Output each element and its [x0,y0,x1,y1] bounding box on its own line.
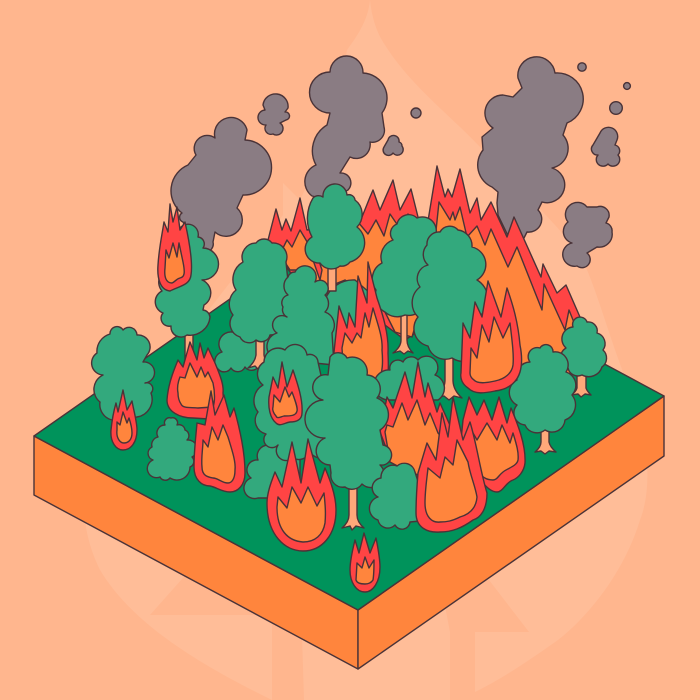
smoke plume right [478,57,583,240]
fire: small flame far left [111,390,137,450]
fire: centre flame [380,362,470,476]
smoke clouds [171,56,630,268]
smoke puff centre [383,135,403,155]
fire: right mountain [427,166,590,385]
background tree silhouette right [440,580,529,700]
smoke puff right [591,127,620,166]
fire: right front flame [416,397,487,532]
ground block [34,222,664,669]
fire: big front flame [267,439,336,551]
fire: flame on tall tree [461,281,522,393]
fire: flame left low [194,391,245,492]
background tree silhouette left [150,570,304,700]
fire: mid flame behind big tree [334,262,388,400]
smoke plume left [171,118,272,252]
fire: right rear flame [460,397,525,492]
small bush left [147,418,197,480]
smoke dots [411,63,630,118]
fire: back ridge [268,180,427,340]
tree top centre [305,184,365,291]
smoke puff upper left [258,94,290,135]
bush lower left of big tree [244,445,300,499]
tree with small flame [254,344,336,461]
bush behind centre flame [374,356,444,400]
bush behind left tree [215,332,270,372]
tree centre tall narrow [267,266,334,365]
fire: small front flame [350,533,380,592]
tree behind centre [325,280,380,360]
bush centre low [369,463,430,529]
tree behind top left flame [155,224,218,360]
tree right centre low [509,345,576,454]
smoke plume middle [305,56,387,200]
tree right of ridge [372,215,445,354]
smoke cloud lower right [563,202,612,268]
tree far right [560,317,607,397]
tree far left [92,327,155,420]
fire: flame on tree [269,362,302,425]
fire: flame left centre [167,342,225,420]
fire: flame top left [158,204,192,291]
tall tree right of centre [412,226,488,400]
tree left centre [229,239,291,370]
big centre tree [305,353,392,530]
